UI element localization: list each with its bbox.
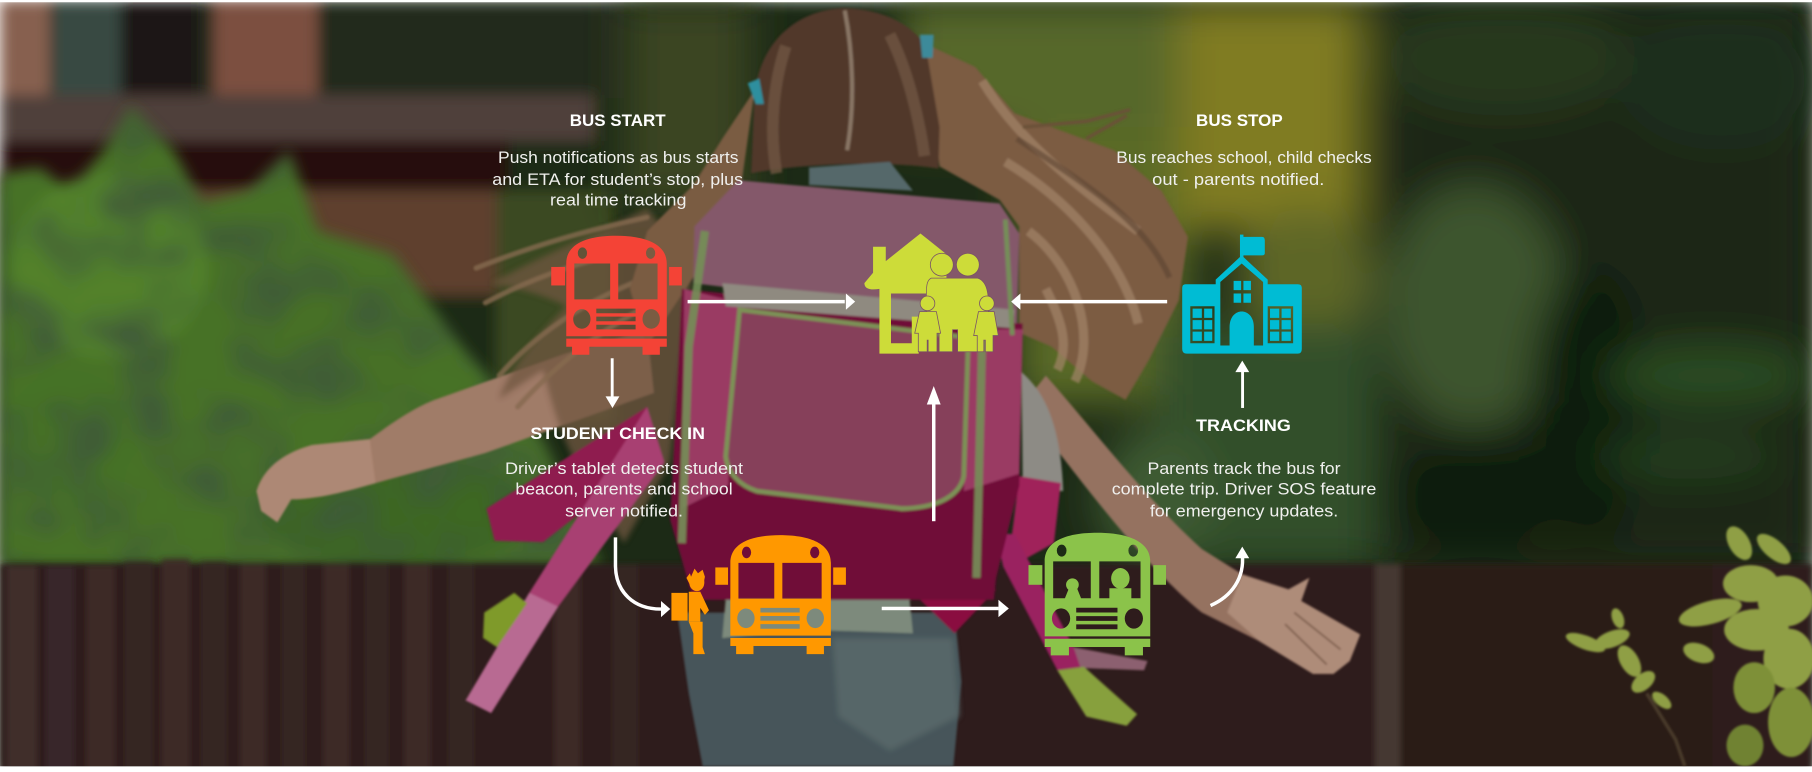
text block: bus stop description: Bus reaches school, child checks <box>1116 149 1372 167</box>
icon: student with backpack <box>671 569 709 654</box>
arrow: bus up to family <box>927 386 941 521</box>
heading: bus stop: BUS STOP <box>1196 111 1283 130</box>
right strap <box>996 534 1084 670</box>
text block: tracking description: Parents track the bus for <box>1148 460 1341 478</box>
text block: bus start description <box>492 149 743 210</box>
jeans <box>677 613 961 766</box>
arrow: tracking to school <box>1235 361 1249 408</box>
arrow: green bus curve to tracking <box>1211 547 1249 606</box>
text block: bus stop description <box>1116 149 1372 189</box>
collar <box>809 162 913 191</box>
text block: bus stop description: out - parents notified. <box>1152 171 1324 189</box>
panel: student check in <box>505 424 846 654</box>
panel: tracking <box>1112 416 1376 521</box>
backdrop: left bush <box>0 104 612 566</box>
icon: blue school building <box>1182 235 1302 354</box>
backpack pink sides <box>682 289 1023 509</box>
white sleeve <box>1022 372 1063 491</box>
heading: bus start: BUS START <box>570 111 666 130</box>
text block: tracking description <box>1112 460 1376 521</box>
arrow: orange bus to green bus <box>882 600 1009 617</box>
backpack top flap <box>693 180 1019 324</box>
girl figure <box>257 8 1360 766</box>
text block: student check in description: Driver’s tablet detects student <box>505 460 744 478</box>
backpack zip band <box>722 283 1015 328</box>
backpack main panel <box>726 310 968 509</box>
icon: family with house <box>864 233 998 354</box>
text block: bus start description: Push notifications as bus starts <box>498 149 738 167</box>
head <box>751 8 940 173</box>
right flap <box>909 589 996 633</box>
text block: bus start description: real time tracking <box>550 192 686 210</box>
left hair body <box>491 208 693 543</box>
backdrop: plant lower right <box>1564 522 1812 766</box>
text block: student check in description: server notified. <box>565 503 683 521</box>
right pigtail <box>926 44 1188 400</box>
backdrop: centre and right foliage <box>624 0 1812 566</box>
icon: red school bus <box>551 236 682 355</box>
arrow: bus start to student check in <box>606 358 619 408</box>
arrow: school to family <box>1011 294 1167 310</box>
text block: student check in description <box>505 460 744 521</box>
text block: tracking description: for emergency updates. <box>1150 503 1338 521</box>
backdrop: wooden fence <box>0 559 1812 772</box>
heading: tracking: TRACKING <box>1196 416 1291 435</box>
left pigtail <box>630 90 755 347</box>
backpack bottom <box>670 289 1023 600</box>
text block: bus start description: and ETA for student’s stop, plus <box>492 171 743 189</box>
icon: orange school bus <box>715 535 846 654</box>
panel: bus stop <box>1116 111 1372 354</box>
text block: student check in description: beacon, parents and school <box>515 481 733 499</box>
arrow: student check in curve to bus <box>615 537 670 617</box>
left straps <box>487 407 653 542</box>
arrow: bus start to family <box>688 294 855 310</box>
heading: student check in: STUDENT CHECK IN <box>530 424 705 443</box>
text block: tracking description: complete trip. Driver SOS feature <box>1112 481 1376 499</box>
panel: bus start <box>492 111 743 355</box>
bare waist <box>722 599 913 638</box>
left hair wisps <box>476 217 653 407</box>
left arm <box>368 336 654 484</box>
right arm <box>1023 376 1360 674</box>
icon: green school bus with passengers <box>1028 533 1166 655</box>
hair ties <box>748 79 764 104</box>
